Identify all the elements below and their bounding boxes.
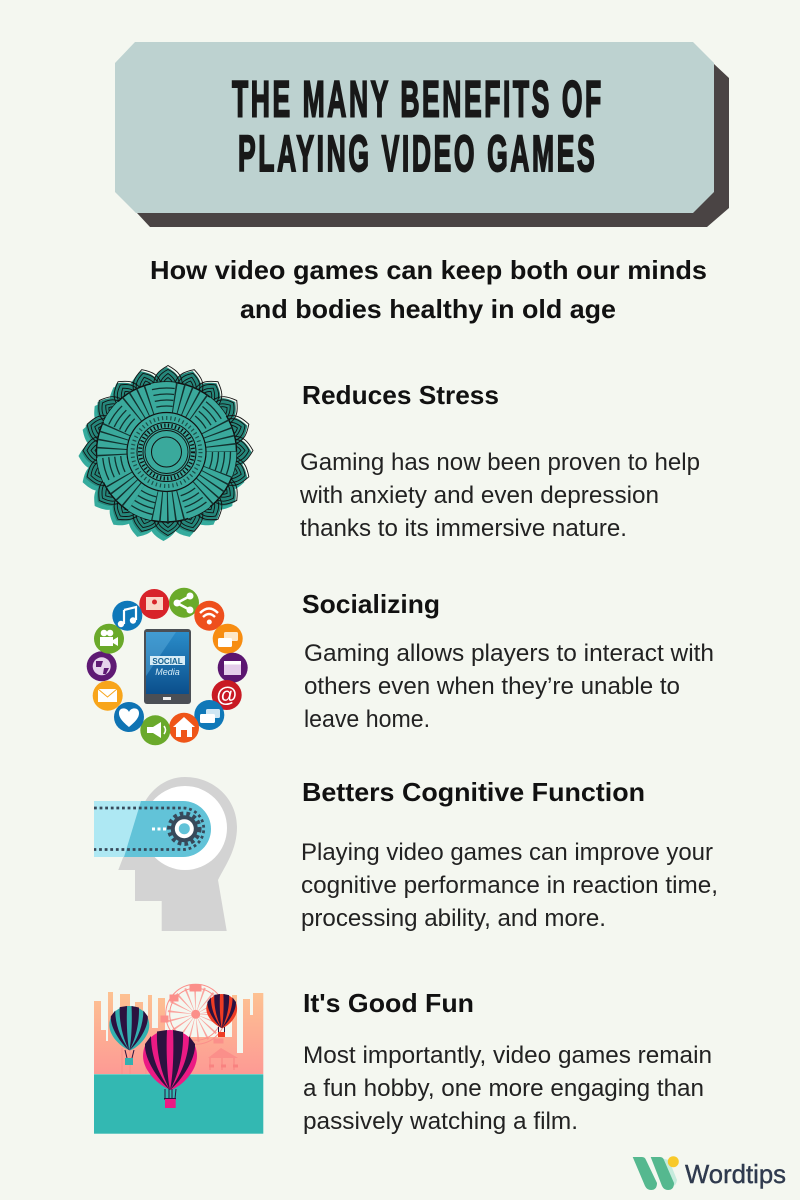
icon: head with gear [94,777,237,931]
text: cognitive body: cognitive performance in reaction time, [301,872,718,899]
text: reduces stress body: with anxiety and even depression [299,482,659,509]
subtitle: and bodies healthy in old age [240,294,616,324]
title text: PLAYING VIDEO GAMES [238,125,595,182]
logo mark [633,1156,679,1190]
text: reduces stress body [299,449,700,542]
heading: Socializing: Socializing [302,589,440,619]
subtitle [150,255,707,324]
blue band [94,801,211,857]
text: good fun body [303,1042,712,1135]
head silhouette [118,777,237,931]
band light part [94,801,141,857]
dotted track [94,808,204,850]
heading: It's Good Fun: It's Good Fun [303,988,474,1018]
phone: SOCIAL [152,657,183,666]
text: cognitive body: processing ability, and more. [301,905,606,932]
icon: hot air balloons [94,984,263,1134]
skyline [94,992,263,1074]
app bubbles: @ [216,684,237,707]
text: good fun body: passively watching a film. [303,1108,578,1135]
text: socializing body: leave home. [304,706,430,733]
subtitle: How video games can keep both our minds [150,255,707,285]
water [94,1074,263,1134]
text: socializing body: others even when they’re unable to [304,673,680,700]
phone: Media [155,667,180,677]
heading: Betters Cognitive Function: Betters Cognitive Function [302,777,645,807]
text: good fun body: Most importantly, video games remain [303,1042,712,1069]
carousel [208,1048,238,1070]
logo: Wordtips [633,1156,786,1190]
white dots [152,828,166,830]
red balloon [206,994,237,1037]
pink balloon [143,1030,197,1108]
app bubbles [87,588,248,745]
title text: THE MANY BENEFITS OF [232,70,601,128]
text: good fun body: a fun hobby, one more engaging than [303,1075,704,1102]
heading: Reduces Stress: Reduces Stress [302,380,499,410]
text: cognitive body: Playing video games can improve your [301,839,713,866]
text: reduces stress body: thanks to its immersive nature. [300,515,627,542]
title text [232,70,601,182]
brain circle [143,786,227,870]
text: socializing body: Gaming allows players to interact with [304,640,714,667]
gear [169,814,199,844]
icon: social media ring [87,588,248,745]
text: reduces stress body: Gaming has now been proven to help [300,449,700,476]
title banner [115,42,729,227]
phone [144,629,191,704]
ferris wheel [122,984,226,1074]
logo text: Wordtips [685,1159,786,1189]
banner panel [115,42,714,213]
text: socializing body [304,640,714,733]
banner shadow [137,64,729,227]
teal balloon [109,1006,149,1065]
text: cognitive body [301,839,718,932]
icon: mandala [78,365,253,541]
